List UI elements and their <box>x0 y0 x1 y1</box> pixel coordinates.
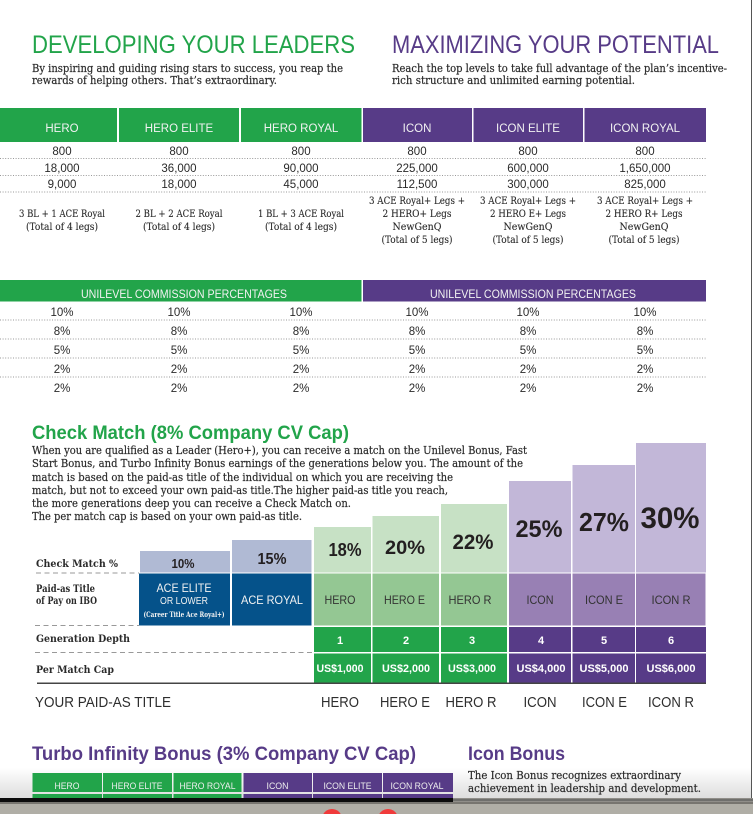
turbo infinity table: ICON <box>266 781 289 792</box>
turbo infinity table <box>32 773 453 799</box>
paid-as title row: ACE ELITE <box>156 581 212 595</box>
unilevel commission header: UNILEVEL COMMISSION PERCENTAGES <box>430 289 636 301</box>
requirements table rows: 3 BL + 1 ACE Royal <box>19 208 106 220</box>
check match percentage stepped bars: 22% <box>452 531 494 554</box>
check match description: Start Bonus, and Turbo Infinity Bonus earnings of the generations below you. The amount of the <box>32 456 523 470</box>
your paid-as title row: HERO E <box>380 695 430 711</box>
heading: developing your leaders: DEVELOPING YOUR LEADERS <box>32 31 355 59</box>
requirements table rows: (Total of 4 legs) <box>26 221 98 233</box>
requirements table rows: 18,000 <box>161 179 197 191</box>
heading: developing your leaders: rewards of helping others. That’s extraordinary. <box>32 73 277 87</box>
requirements table rows: (Total of 5 legs) <box>382 234 452 246</box>
requirements table rows: 300,000 <box>507 179 549 191</box>
heading: developing your leaders <box>32 31 355 87</box>
requirements table rows: 600,000 <box>507 163 549 175</box>
paid-as title row: ACE ROYAL <box>241 593 303 607</box>
row labels: Check Match % <box>36 558 118 570</box>
row labels: Per Match Cap <box>36 664 114 676</box>
paid-as title row: HERO R <box>448 593 492 607</box>
paid-as title row: ICON R <box>652 593 691 607</box>
icon bonus block: achievement in leadership and development. <box>468 781 701 795</box>
unilevel percentages table: 2% <box>54 383 70 395</box>
check match percentage stepped bars <box>140 443 706 572</box>
generation depth row <box>314 627 706 652</box>
check match percentage stepped bars: 30% <box>640 502 700 535</box>
icon bonus block: Icon Bonus <box>468 744 565 765</box>
generation depth row: 1 <box>337 635 343 647</box>
check match percentage stepped bars: 27% <box>579 507 629 537</box>
unilevel percentages table: 8% <box>293 326 309 338</box>
requirements table rows: 90,000 <box>283 163 319 175</box>
requirements table rows: (Total of 5 legs) <box>492 234 564 246</box>
check match percentage stepped bars: 18% <box>328 540 362 560</box>
title header row: ICON ROYAL <box>610 123 681 135</box>
requirements table rows: (Total of 4 legs) <box>143 221 215 233</box>
unilevel percentages table: 2% <box>409 383 425 395</box>
generation depth row: 5 <box>601 635 607 647</box>
requirements table rows: NewGenQ <box>620 221 669 233</box>
requirements table rows: (Total of 4 legs) <box>265 221 337 233</box>
paid-as title row <box>139 574 706 626</box>
unilevel percentages table: 10% <box>167 307 191 319</box>
unilevel percentages table <box>0 307 706 395</box>
per match cap row <box>314 654 706 682</box>
requirements table rows: 800 <box>407 146 427 158</box>
check match description: match, but not to exceed your own paid-as title.The higher paid-as title you reach, <box>32 483 448 497</box>
requirements table rows: 800 <box>635 146 655 158</box>
check match percentage stepped bars: 10% <box>172 556 195 571</box>
requirements table rows: 3 ACE Royal+ Legs + <box>480 195 576 207</box>
unilevel percentages table: 10% <box>405 307 429 319</box>
heading: turbo infinity bonus: Turbo Infinity Bonus (3% Company CV Cap) <box>32 744 416 765</box>
requirements table rows: 800 <box>169 146 189 158</box>
generation depth row: 2 <box>403 635 409 647</box>
your paid-as title row: ICON E <box>582 695 627 711</box>
requirements table rows: 2 HERO R+ Legs <box>606 208 682 220</box>
paid-as title row: HERO E <box>384 593 425 607</box>
per match cap row: US$5,000 <box>580 663 628 675</box>
unilevel percentages table: 2% <box>520 364 536 376</box>
row labels: Paid-as Title <box>36 583 95 595</box>
check match percentage stepped bars: 25% <box>516 516 562 543</box>
unilevel percentages table: 8% <box>520 326 536 338</box>
unilevel percentages table: 5% <box>54 345 70 357</box>
heading: check match: Check Match (8% Company CV Cap) <box>32 423 349 444</box>
title header row: ICON ELITE <box>496 123 560 135</box>
paid-as title row: ICON <box>526 593 554 607</box>
turbo infinity table: ICON ROYAL <box>390 781 444 792</box>
unilevel percentages table: 2% <box>293 364 309 376</box>
turbo infinity table: HERO ELITE <box>112 781 162 792</box>
requirements table rows: 2 HERO E+ Legs <box>490 208 566 220</box>
your paid-as title row: YOUR PAID-AS TITLE <box>35 695 171 711</box>
check match description: The per match cap is based on your own paid-as title. <box>32 509 302 523</box>
generation depth row: 3 <box>469 635 475 647</box>
requirements table rows: 800 <box>52 146 72 158</box>
requirements table rows <box>0 146 706 246</box>
title header row: ICON <box>403 123 431 135</box>
requirements table rows: 225,000 <box>396 163 438 175</box>
per match cap row: US$6,000 <box>646 663 696 675</box>
unilevel percentages table: 2% <box>520 383 536 395</box>
unilevel commission header <box>0 280 706 302</box>
requirements table rows: NewGenQ <box>392 221 442 233</box>
requirements table rows: 112,500 <box>397 179 437 191</box>
row labels: of Pay on IBO <box>36 595 97 607</box>
viewer toolbar strip at bottom <box>0 798 753 814</box>
unilevel percentages table: 10% <box>289 307 313 319</box>
per match cap row: US$1,000 <box>316 663 364 675</box>
requirements table rows: 3 ACE Royal+ Legs + <box>369 195 465 207</box>
unilevel percentages table: 2% <box>171 364 187 376</box>
paid-as title row: OR LOWER <box>160 595 208 607</box>
unilevel commission header: UNILEVEL COMMISSION PERCENTAGES <box>81 289 287 301</box>
unilevel percentages table: 2% <box>171 383 187 395</box>
unilevel percentages table: 8% <box>637 326 653 338</box>
check match description: When you are qualified as a Leader (Hero+), you can receive a match on the Unilevel Bonus, Fast <box>32 443 527 457</box>
unilevel percentages table: 2% <box>637 364 653 376</box>
your paid-as title row: HERO <box>321 695 359 711</box>
title header row: HERO ROYAL <box>264 123 339 135</box>
unilevel percentages table: 10% <box>633 307 657 319</box>
unilevel percentages table: 5% <box>409 345 425 357</box>
unilevel percentages table: 8% <box>54 326 70 338</box>
title header row: HERO ELITE <box>145 123 214 135</box>
requirements table rows: NewGenQ <box>504 221 553 233</box>
your paid-as title row: HERO R <box>446 695 496 711</box>
per match cap row: US$3,000 <box>448 663 496 675</box>
requirements table rows: 18,000 <box>44 163 80 175</box>
check match percentage stepped bars: 15% <box>258 551 286 568</box>
requirements table rows: 45,000 <box>283 179 319 191</box>
title header row <box>0 108 706 142</box>
requirements table rows: 9,000 <box>48 179 76 191</box>
your paid-as title row: ICON <box>524 695 556 711</box>
check match description: match is based on the paid-as title of the individual on which you are receiving the <box>32 470 453 484</box>
unilevel percentages table: 2% <box>54 364 70 376</box>
unilevel percentages table: 10% <box>516 307 540 319</box>
your paid-as title row: ICON R <box>648 695 694 711</box>
per match cap row: US$2,000 <box>382 663 430 675</box>
requirements table rows: 1,650,000 <box>619 163 671 175</box>
unilevel percentages table: 5% <box>293 345 309 357</box>
unilevel percentages table: 10% <box>50 307 74 319</box>
requirements table rows: 800 <box>518 146 538 158</box>
paid-as title row: ICON E <box>585 593 623 607</box>
requirements table rows: 1 BL + 3 ACE Royal <box>258 208 345 220</box>
requirements table rows: 825,000 <box>624 179 666 191</box>
requirements table rows: (Total of 5 legs) <box>608 234 680 246</box>
row labels <box>35 558 706 684</box>
turbo infinity table: HERO ROYAL <box>180 781 236 792</box>
requirements table rows: 2 HERO+ Legs <box>382 208 452 220</box>
requirements table rows: 36,000 <box>161 163 197 175</box>
turbo infinity table: HERO <box>54 781 80 792</box>
unilevel percentages table: 8% <box>171 326 187 338</box>
turbo infinity table: ICON ELITE <box>324 781 372 792</box>
heading: maximizing your potential: rich structure and unlimited earning potential. <box>392 73 635 87</box>
unilevel percentages table: 2% <box>409 364 425 376</box>
unilevel percentages table: 8% <box>409 326 425 338</box>
check match description <box>32 443 527 523</box>
unilevel percentages table: 5% <box>637 345 653 357</box>
unilevel percentages table: 5% <box>520 345 536 357</box>
requirements table rows: 2 BL + 2 ACE Royal <box>136 208 223 220</box>
icon bonus block: The Icon Bonus recognizes extraordinary <box>468 768 681 782</box>
unilevel percentages table: 5% <box>171 345 187 357</box>
heading: maximizing your potential <box>392 31 727 87</box>
row labels: Generation Depth <box>36 633 130 645</box>
check match description: the more generations deep you can receive a Check Match on. <box>32 496 351 510</box>
generation depth row: 4 <box>538 635 545 647</box>
check match percentage stepped bars: 20% <box>385 537 425 559</box>
your paid-as title row <box>35 695 694 711</box>
requirements table rows: 800 <box>291 146 311 158</box>
requirements table rows: 3 ACE Royal+ Legs + <box>597 195 693 207</box>
unilevel percentages table: 2% <box>637 383 653 395</box>
paid-as title row: (Career Title Ace Royal+) <box>144 610 224 619</box>
unilevel percentages table: 2% <box>293 383 309 395</box>
icon bonus block <box>468 744 701 795</box>
per match cap row: US$4,000 <box>516 663 566 675</box>
heading: developing your leaders: By inspiring and guiding rising stars to success, you reap the <box>32 61 343 75</box>
generation depth row: 6 <box>668 635 674 647</box>
paid-as title row: HERO <box>324 593 356 607</box>
title header row: HERO <box>45 123 79 135</box>
